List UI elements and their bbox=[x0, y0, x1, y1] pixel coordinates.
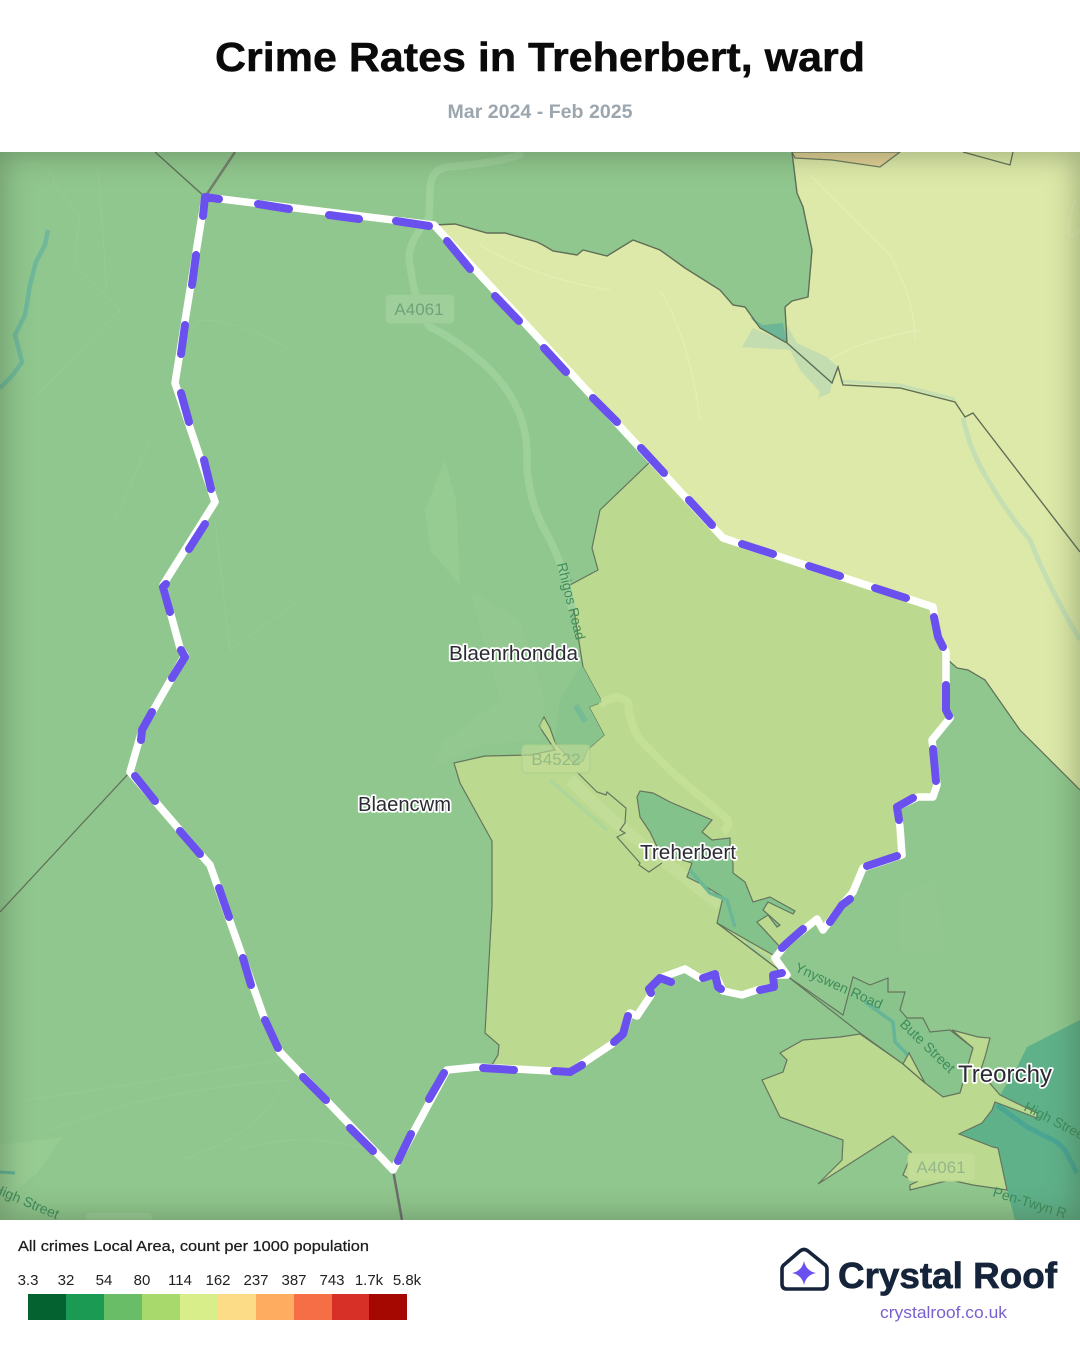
legend values: 3.3 bbox=[18, 1272, 38, 1289]
legend values: 114 bbox=[168, 1272, 192, 1289]
area: orange top bbox=[792, 152, 900, 167]
area: Treorchy dark green bbox=[787, 976, 973, 1097]
legend values bbox=[18, 1272, 422, 1289]
legend values: 54 bbox=[96, 1272, 112, 1289]
river Treorchy bbox=[865, 1002, 908, 1055]
road labels: Ynyswen Road bbox=[793, 959, 885, 1012]
date range subtitle: Mar 2024 - Feb 2025 bbox=[448, 102, 633, 123]
road shield B4522 bbox=[522, 745, 590, 773]
road labels: Bute Street bbox=[897, 1016, 958, 1076]
roads in lime region bbox=[550, 697, 770, 960]
legend values: 387 bbox=[281, 1272, 307, 1289]
teal stub south-west bbox=[0, 1172, 15, 1173]
brand name: Crystal Roof bbox=[838, 1255, 1058, 1296]
area: Treherbert lime region bbox=[454, 462, 950, 1072]
area: teal river corner bbox=[750, 317, 787, 343]
purple dashes bbox=[135, 197, 949, 1161]
legend values: 1.7k bbox=[355, 1272, 384, 1289]
pale rivers and roads bbox=[480, 175, 1080, 640]
place labels: Blaenrhondda bbox=[449, 643, 579, 665]
area: east dark teal bbox=[959, 1020, 1080, 1220]
legend bbox=[18, 1238, 422, 1320]
road shield A4061: A4061 bbox=[394, 300, 444, 319]
place labels: Treorchy bbox=[958, 1061, 1052, 1088]
place labels bbox=[358, 643, 1052, 1088]
legend values: 743 bbox=[319, 1272, 345, 1289]
road labels: Rhigos Road bbox=[554, 561, 589, 641]
road shield A4061 bbox=[386, 295, 454, 323]
faint tracks bbox=[22, 164, 370, 1160]
place labels: Blaencwm bbox=[358, 794, 451, 816]
ward boundary bbox=[130, 197, 950, 1170]
boundary lines bbox=[0, 152, 1080, 1220]
valley outline bbox=[577, 772, 662, 872]
place labels: Treherbert bbox=[640, 842, 736, 864]
area: north-east pale yellow bbox=[434, 152, 1080, 790]
legend title: All crimes Local Area, count per 1000 population bbox=[18, 1238, 369, 1255]
legend values: 162 bbox=[205, 1272, 231, 1289]
white outline bbox=[130, 197, 950, 1170]
road shield A4061 south: A4061 bbox=[916, 1158, 966, 1177]
road shield cut off bbox=[86, 1213, 152, 1220]
icon: house with star bbox=[782, 1250, 827, 1289]
legend colour scale bbox=[28, 1294, 407, 1320]
legend values: 32 bbox=[58, 1272, 74, 1289]
Blaenrhondda valley pocket bbox=[555, 667, 604, 765]
road shield A4061 south bbox=[908, 1152, 965, 1182]
small teal pitch bbox=[573, 704, 588, 723]
teal stream west bbox=[0, 230, 48, 388]
A4061 road bbox=[409, 153, 572, 610]
pocket river bbox=[690, 870, 735, 927]
title: Crime Rates in Treherbert, ward bbox=[215, 34, 865, 80]
legend values: 237 bbox=[243, 1272, 269, 1289]
legend values: 80 bbox=[134, 1272, 150, 1289]
map edge vignette bbox=[0, 152, 1080, 1220]
area: reservoir bbox=[742, 328, 832, 398]
area: Treorchy south lime bbox=[762, 1030, 1037, 1190]
website: crystalroof.co.uk bbox=[880, 1304, 1008, 1322]
settlement patches bbox=[0, 460, 945, 1205]
road shield B4522: B4522 bbox=[531, 750, 581, 769]
area: Treherbert centre green pocket bbox=[637, 791, 795, 955]
east river bbox=[997, 1105, 1077, 1173]
legend values: 5.8k bbox=[393, 1272, 422, 1289]
road labels: Pen-Twyn R bbox=[991, 1184, 1069, 1221]
logo bbox=[782, 1250, 1058, 1322]
road labels bbox=[0, 561, 1080, 1222]
